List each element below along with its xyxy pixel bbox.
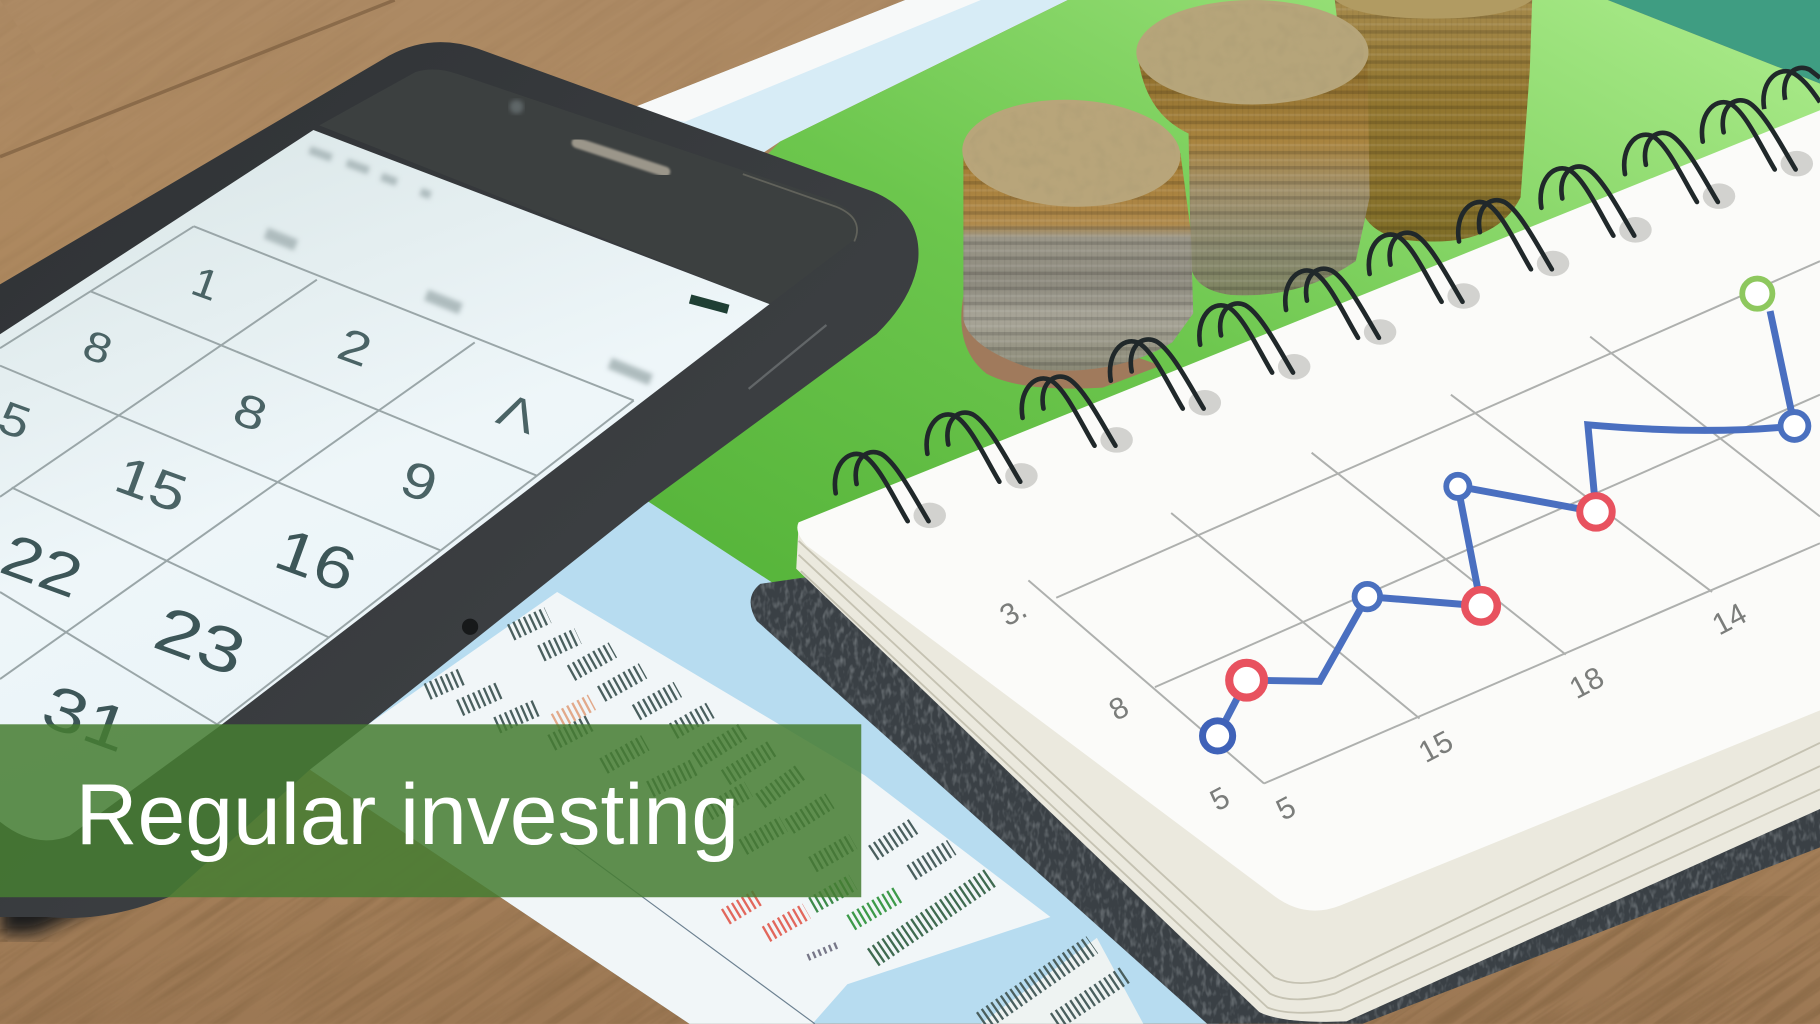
phone side port [462,619,478,635]
calendar numbers: 16 [266,516,365,606]
phone camera [510,100,523,114]
banner background [0,724,861,897]
phone speaker [577,143,665,172]
calendar numbers: 31 [34,671,139,765]
calendar numbers: 23 [146,593,254,690]
chart axis labels: 15 [1413,725,1459,770]
notebook [751,68,1820,1024]
calendar numbers [0,258,545,765]
teal sheet corner [1608,0,1820,84]
calendar numbers: 15 [108,445,195,525]
phone status marks [264,146,653,385]
top light strip of paper [627,0,1068,197]
chart grid [1028,261,1820,783]
phone glass [319,70,858,304]
chart axis labels: 8 [1104,690,1134,727]
line chart [1202,279,1808,751]
calendar numbers: 9 [393,449,445,514]
spiral binding [835,68,1820,528]
calendar numbers: 1 [185,258,226,310]
chart axis labels: 3. [995,592,1032,633]
notebook cover [751,464,1820,1024]
calendar numbers: 8 [77,321,119,374]
green sheet [580,0,1820,650]
coin stack: left [960,96,1193,389]
calendar numbers: Λ [491,382,545,444]
light blue printed sheet with data marks [310,488,1219,1024]
title banner [0,724,861,897]
chart axis labels: 14 [1707,597,1752,642]
calendar grid [0,226,634,724]
chart axis labels: 5 [1271,790,1301,827]
chart axis labels: 18 [1564,661,1609,706]
notebook page stack [796,348,1820,1022]
phone body [0,42,919,918]
calendar numbers: 2 [331,317,379,377]
notebook top page [797,110,1820,911]
phone shadow [0,859,151,934]
coin stack: right [1335,0,1532,242]
chart axis labels [995,592,1752,827]
chart axis labels: 5 [1205,781,1235,818]
phone screen [0,130,770,840]
calendar numbers: 8 [227,382,274,442]
coin stack: middle [1136,0,1370,295]
title: Regular investing [75,767,739,863]
phone [0,42,919,934]
